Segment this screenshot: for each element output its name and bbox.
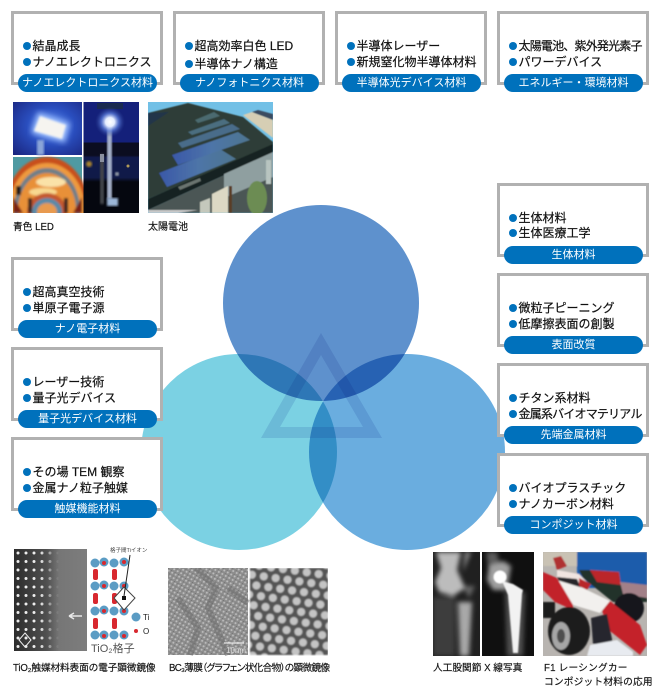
card: 生体材料: 生体材料 bbox=[518, 211, 567, 225]
card: ナノ電子材料: 超高真空技術 bbox=[32, 285, 105, 299]
card: ナノエレクトロニクス材料: ナノエレクトロニクス bbox=[32, 55, 152, 69]
card: 触媒機能材料: 触媒機能材料 bbox=[54, 503, 120, 515]
card: ナノフォトニクス材料: 半導体ナノ構造 bbox=[194, 57, 278, 71]
photo: BC3 film micrographs: 10nm bbox=[226, 646, 246, 655]
photo: F1 racing car bbox=[543, 552, 647, 656]
diagram: TiO2 lattice: 格子間Tiイオン bbox=[110, 546, 148, 554]
card: 半導体光デバイス材料 bbox=[335, 11, 487, 92]
card: 表面改質: 表面改質 bbox=[552, 339, 596, 351]
card: ナノエレクトロニクス材料: ナノエレクトロニクス材料 bbox=[22, 77, 153, 89]
card: 先端金属材料: チタン系材料 bbox=[518, 391, 591, 405]
card: 量子光デバイス材料: 量子光デバイス bbox=[32, 391, 116, 405]
card: 触媒機能材料: 金属ナノ粒子触媒 bbox=[32, 481, 128, 495]
card: ナノフォトニクス材料: 超高効率白色 LED bbox=[194, 39, 293, 53]
card: 表面改質 bbox=[497, 273, 649, 354]
card: 半導体光デバイス材料: 半導体レーザー bbox=[356, 39, 440, 53]
card: 量子光デバイス材料 bbox=[11, 347, 163, 428]
card: ナノエレクトロニクス材料: 結晶成長 bbox=[32, 39, 81, 53]
card: 半導体光デバイス材料: 半導体光デバイス材料 bbox=[357, 77, 466, 89]
photo: artificial hip joint X-ray bbox=[433, 552, 534, 656]
card: コンポジット材料: コンポジット材料 bbox=[530, 519, 618, 531]
card: 生体材料: 生体材料 bbox=[552, 249, 596, 261]
card: 先端金属材料: 先端金属材料 bbox=[540, 429, 606, 441]
card: 先端金属材料: 金属系バイオマテリアル bbox=[518, 407, 642, 421]
card: ナノフォトニクス材料 bbox=[173, 11, 325, 92]
diagram: TiO2 lattice: Ti bbox=[143, 613, 150, 622]
caption: F1 レーシングカー コンポジット材料の応用: F1 レーシングカー bbox=[544, 663, 628, 674]
card: 生体材料 bbox=[497, 183, 649, 264]
card: 触媒機能材料: その場 TEM 観察 bbox=[32, 465, 124, 479]
caption: TiO2 触媒材料表面の電子顕微鏡像: TiO₂触媒材料表面の電子顕微鏡像 bbox=[13, 663, 155, 674]
card: 先端金属材料 bbox=[497, 363, 649, 444]
caption: F1 レーシングカー コンポジット材料の応用: コンポジット材料の応用 bbox=[544, 677, 653, 688]
card: エネルギー・環境材料 bbox=[497, 11, 649, 92]
diagram: TiO2 lattice: O bbox=[143, 627, 149, 636]
card: ナノ電子材料 bbox=[11, 257, 163, 338]
photo: solar cell roof bbox=[148, 102, 273, 213]
diagram: TiO2 lattice: TiO₂格子 bbox=[91, 641, 135, 655]
card: ナノフォトニクス材料: ナノフォトニクス材料 bbox=[195, 77, 304, 89]
card: コンポジット材料: バイオプラスチック bbox=[518, 481, 626, 495]
caption: 青色 LED: 青色 LED bbox=[13, 222, 54, 233]
photo: TiO2 electron microscope image bbox=[14, 549, 87, 651]
caption: 太陽電池: 太陽電池 bbox=[148, 222, 188, 233]
card: 表面改質: 低摩擦表面の創製 bbox=[518, 317, 615, 331]
card: ナノエレクトロニクス材料 bbox=[11, 11, 163, 92]
card: コンポジット材料: ナノカーボン材料 bbox=[518, 497, 614, 511]
caption: BC3 薄膜の顕微鏡像: BC₃薄膜（グラフェン状化合物）の顕微鏡像 bbox=[169, 663, 329, 674]
card: コンポジット材料 bbox=[497, 453, 649, 534]
card: 触媒機能材料 bbox=[11, 437, 163, 518]
card: 生体材料: 生体医療工学 bbox=[518, 226, 591, 240]
caption: F1 レーシングカー コンポジット材料の応用 bbox=[544, 662, 653, 688]
photo: blue LED lights bbox=[13, 102, 139, 213]
diagram: TiO2 lattice bbox=[90, 546, 150, 655]
card: 半導体光デバイス材料: 新規窒化物半導体材料 bbox=[356, 55, 477, 69]
card: ナノ電子材料: ナノ電子材料 bbox=[55, 323, 120, 335]
card: エネルギー・環境材料: パワーデバイス bbox=[518, 55, 602, 69]
caption: 人工股関節 X 線写真: 人工股関節 X 線写真 bbox=[433, 663, 522, 674]
card: エネルギー・環境材料: エネルギー・環境材料 bbox=[518, 77, 628, 89]
photo: BC3 film micrographs bbox=[168, 568, 328, 656]
card: 量子光デバイス材料: 量子光デバイス材料 bbox=[38, 413, 137, 425]
card: ナノ電子材料: 単原子電子源 bbox=[32, 301, 105, 315]
card: 表面改質: 微粒子ピーニング bbox=[518, 301, 615, 315]
card: エネルギー・環境材料: 太陽電池、紫外発光素子 bbox=[518, 39, 642, 53]
card: 量子光デバイス材料: レーザー技術 bbox=[32, 375, 104, 389]
